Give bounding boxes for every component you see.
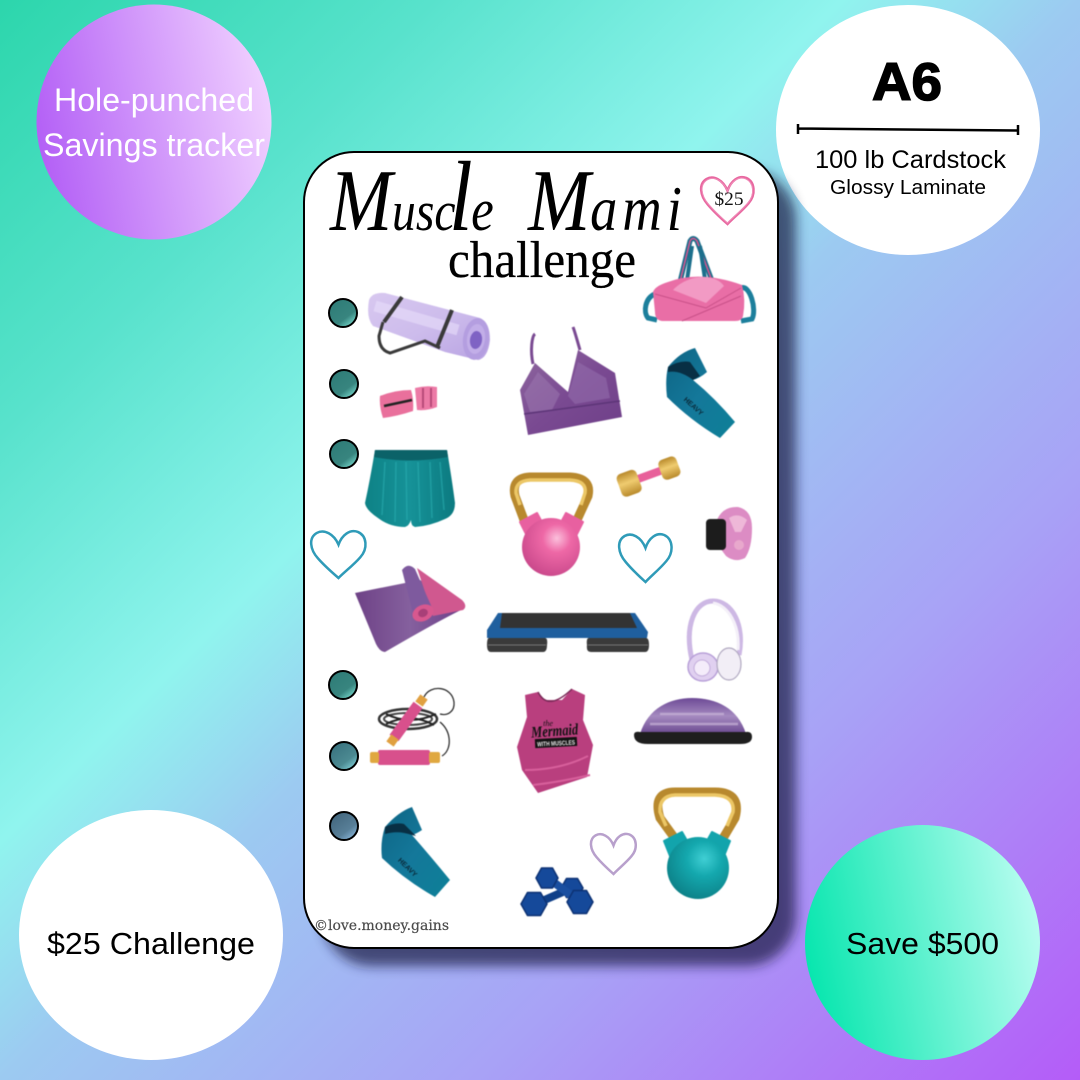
icon: purple and pink yoga mat <box>355 566 465 652</box>
icon: pink heart with $25 <box>701 177 754 224</box>
title: Muscle Mami: ami <box>590 173 687 244</box>
circle: hole-punched savings tracker: Savings tracker <box>43 127 265 163</box>
icon: pink tank top: Mermaid <box>530 721 579 742</box>
icon: jump rope <box>370 688 454 765</box>
circle: A6 size and paper specs: 100 lb Cardstock <box>815 146 1006 174</box>
circle: $25 challenge <box>19 810 283 1060</box>
icon: second teal resistance band <box>381 807 450 897</box>
icon: gold dumbbell with pink bar <box>615 454 683 498</box>
icon: blue heart right <box>619 534 672 582</box>
icon: lavender headphones <box>688 601 741 681</box>
icon: pink kettlebell with gold handle <box>514 477 589 576</box>
icon: teal kettlebell with gold handle <box>658 792 736 899</box>
icon: blue dumbbells <box>521 868 593 916</box>
circle: A6 size and paper specs <box>776 5 1040 255</box>
subtitle: challenge: challenge <box>448 232 636 289</box>
icon: lavender rolled yoga mat <box>368 293 492 362</box>
icon: purple sports bra <box>520 327 622 435</box>
circle: $25 challenge: $25 Challenge <box>47 926 255 961</box>
icon: teal resistance band <box>666 348 735 438</box>
copyright text: ©love.money.gains <box>314 918 449 934</box>
icon: pink tank top <box>517 689 593 793</box>
icon: teal shorts <box>365 450 455 527</box>
icon: second teal resistance band: HEAVY <box>396 857 418 879</box>
icon: teal resistance band: HEAVY <box>682 396 704 418</box>
icon: pink tank top: WITH MUSCLES <box>537 739 576 748</box>
title: Muscle Mami: M <box>527 151 594 249</box>
icon: pink smart watch <box>706 507 752 560</box>
icon: pink heart with $25: $25 <box>714 189 744 210</box>
circle: A6 size and paper specs: Glossy Laminate <box>830 176 986 199</box>
title: Muscle Mami: usc <box>392 182 455 243</box>
circle: save $500 <box>805 825 1040 1060</box>
icon: pink gym bag <box>645 238 754 321</box>
circle: A6 size and paper specs: A6 <box>872 53 942 112</box>
circle: hole-punched savings tracker <box>36 4 272 240</box>
icon: blue aerobic step platform <box>487 613 649 652</box>
circle: hole-punched savings tracker: Hole-punched <box>54 82 254 118</box>
tracker holes <box>329 299 358 840</box>
title: Muscle Mami: e <box>471 177 506 244</box>
icon: pink ankle weights <box>380 386 437 418</box>
icon: purple balance dome <box>634 698 752 744</box>
icon: blue heart left <box>311 531 365 578</box>
title: Muscle Mami: M <box>329 151 396 249</box>
title: Muscle Mami: l <box>449 142 473 253</box>
panel: savings tracker card <box>304 142 778 948</box>
circle: save $500: Save $500 <box>846 926 999 961</box>
icon: purple heart <box>591 834 636 874</box>
icon: pink tank top: the <box>543 719 553 728</box>
card shadow <box>322 170 796 966</box>
